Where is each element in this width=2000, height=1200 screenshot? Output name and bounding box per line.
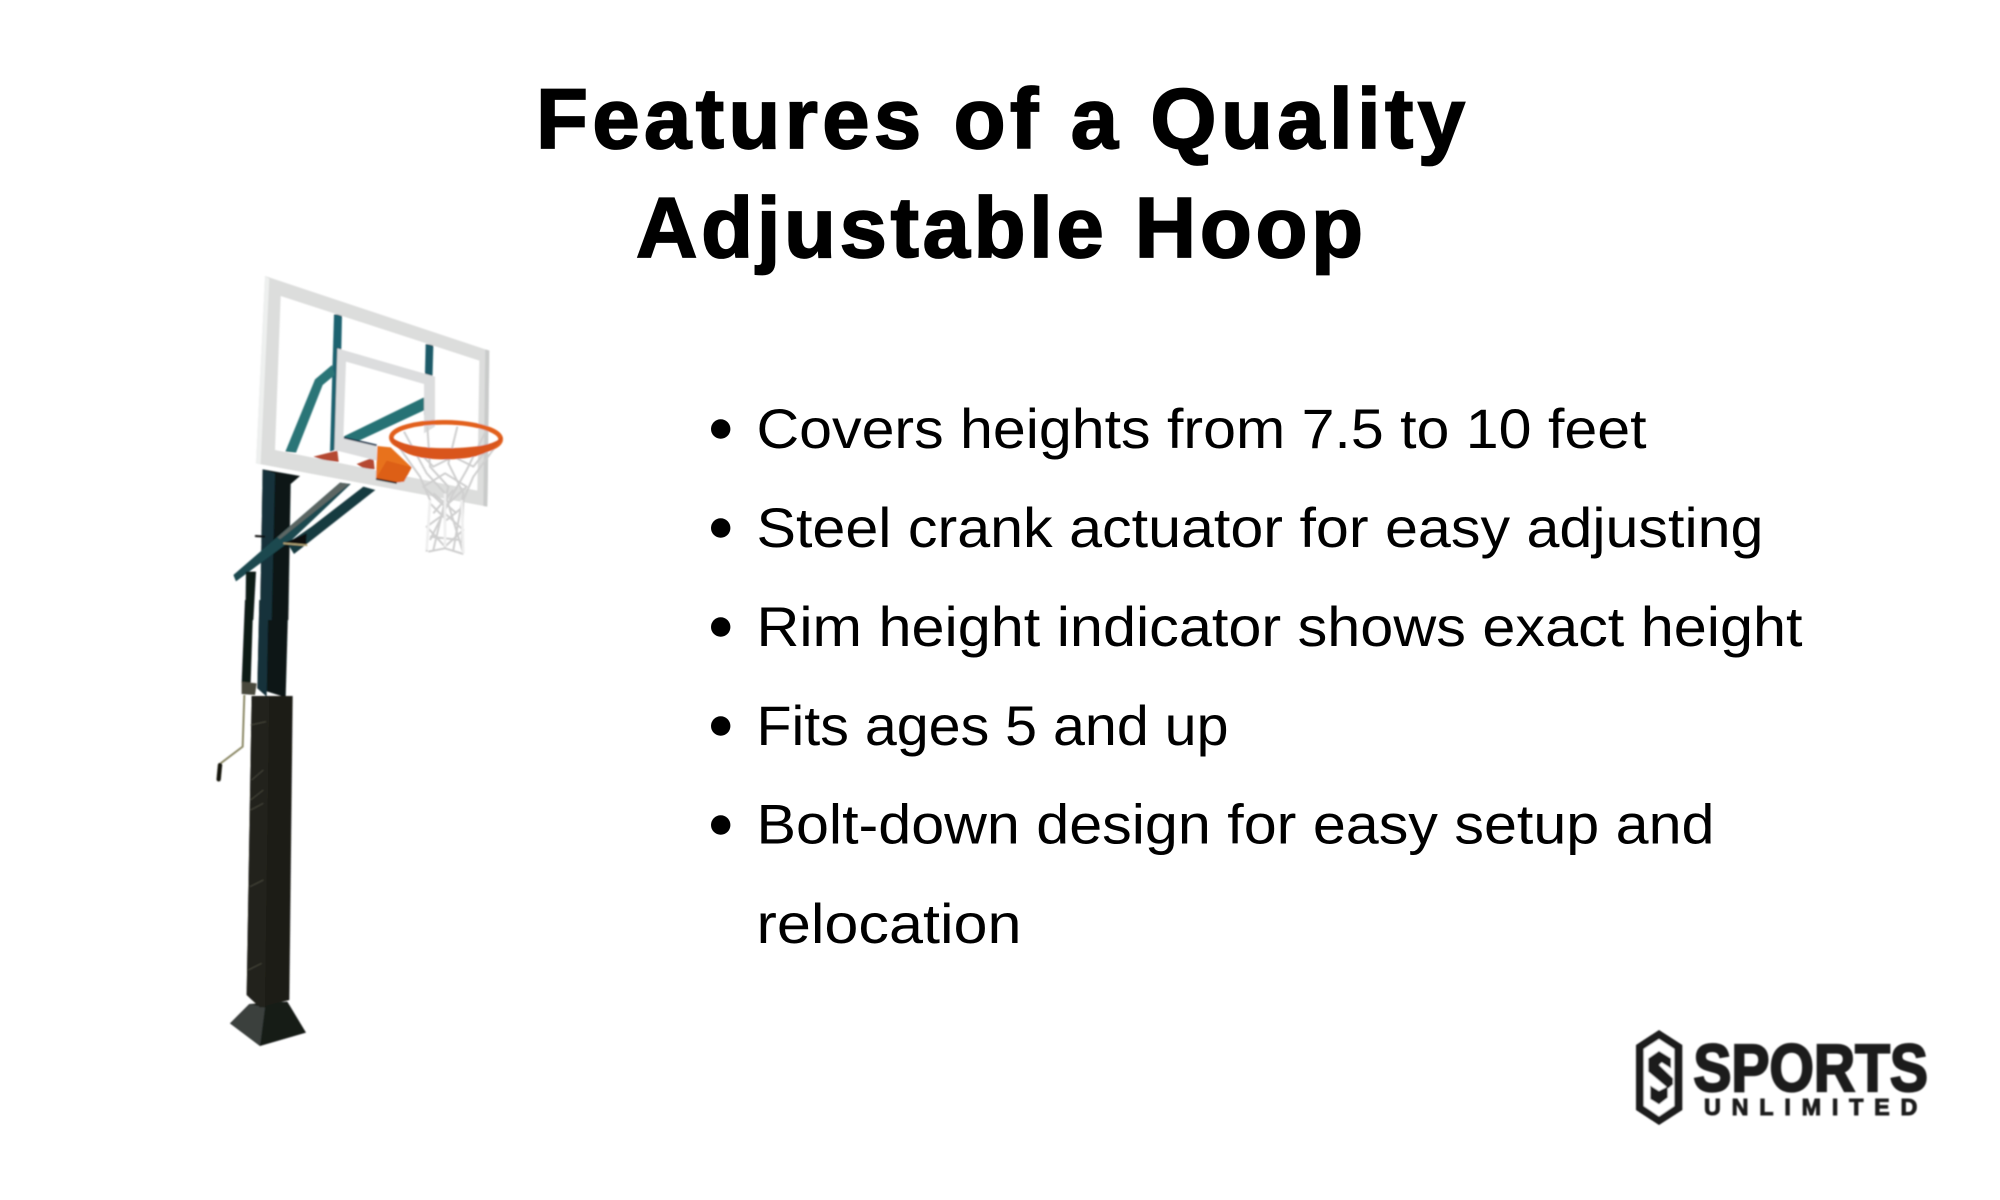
backboard supports <box>285 314 433 469</box>
logo wordmark: UNLIMITED <box>1704 1094 1917 1120</box>
list item: bolt-down design <box>711 792 1714 955</box>
rim bracket <box>376 446 412 483</box>
arms <box>233 483 375 620</box>
backboard frame <box>256 276 489 507</box>
net <box>394 427 497 554</box>
logo wordmark: SPORTS <box>1693 1032 1928 1106</box>
lower pole, pad, crank and base <box>219 600 306 1046</box>
list item: height indicator: Rim height indicator shows exact height <box>756 595 1803 658</box>
title <box>536 72 1465 276</box>
rim <box>391 421 502 459</box>
list item: height range: Covers heights from 7.5 to 10 feet <box>756 397 1647 460</box>
logo: Sports Unlimited <box>1636 1030 1928 1125</box>
shooter square <box>334 348 435 461</box>
title: Adjustable Hoop <box>636 181 1363 276</box>
list item: ages: Fits ages 5 and up <box>756 694 1228 757</box>
list item: crank actuator: Steel crank actuator for easy adjusting <box>756 496 1764 559</box>
list item: bolt-down design: relocation <box>756 892 1022 955</box>
feature list <box>711 397 1803 955</box>
logo icon <box>1636 1030 1682 1125</box>
list item: bolt-down design: Bolt-down design for easy setup and <box>756 792 1714 856</box>
pole top <box>260 469 300 620</box>
basketball hoop illustration <box>219 276 502 1046</box>
upper pole, arms, backboard and rim <box>233 276 502 620</box>
title: Features of a Quality <box>536 72 1465 167</box>
